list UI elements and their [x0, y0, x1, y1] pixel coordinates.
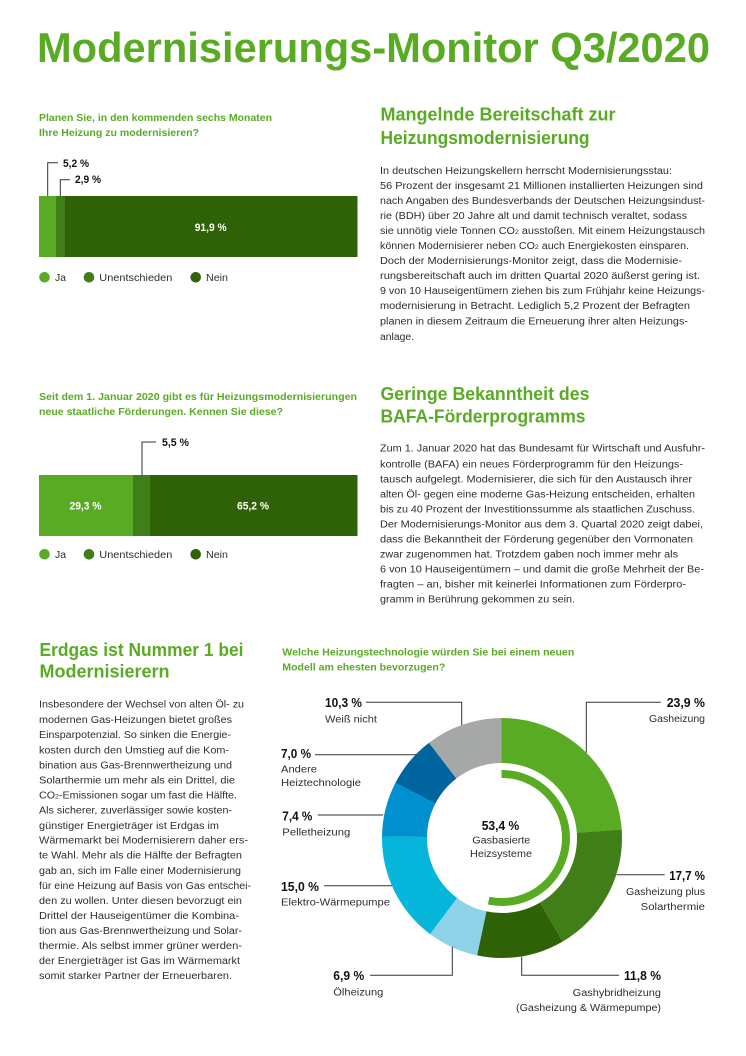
- panel: text BAFA program: [380, 383, 705, 606]
- callout: Elektro-Wärmepumpe: 15,0 %: [281, 880, 319, 894]
- callout: Gashybridheizung: (Gasheizung & Wärmepumpe): [516, 1003, 661, 1014]
- body text 3: den zu wollen. Unter diesen bevorzugt ein: [39, 896, 242, 907]
- body text 2: zwar zugenommen hat. Trotzdem gaben noch immer mehr als: [380, 550, 678, 561]
- body text 3: thermie. Als selbst immer grüner werden-: [39, 941, 242, 952]
- body text 1: In deutschen Heizungskellern herrscht Modernisierungsstau:: [380, 166, 672, 177]
- body text 1: rungsbereitschaft auch im dritten Quartal 2020 äußerst gering ist.: [380, 271, 700, 282]
- callout: Gashybridheizung: [516, 957, 661, 1014]
- callout: 5,2 %: 5,2 %: [63, 158, 89, 170]
- callout: Weiß nicht: 10,3 %: [325, 696, 362, 710]
- title: Modernisierungs-Monitor Q3/2020: [37, 24, 710, 71]
- callout: Gasheizung: Gasheizung: [649, 714, 705, 725]
- callout: Pelletheizung: [282, 809, 383, 839]
- body text 3: Drittel der Hauseigentümer die Kombina-: [39, 911, 239, 922]
- legend 1: [39, 272, 228, 284]
- body text 2: Zum 1. Januar 2020 hat das Bundesamt für Wirtschaft und Ausfuhr-: [380, 444, 705, 455]
- heading: Geringe Bekanntheit: Geringe Bekanntheit des: [380, 383, 590, 404]
- body text 1: Doch der Modernisierungs-Monitor zeigt, dass die Modernisie-: [380, 256, 682, 267]
- question heading 2: [39, 391, 357, 418]
- callout: 5,5 %: 5,5 %: [162, 437, 189, 449]
- body text 3: CO2-Emissionen sogar um fast die Hälfte.: [39, 790, 237, 801]
- callout: Weiß nicht: Weiß nicht: [325, 715, 377, 726]
- body text 3: günstiger Energieträger ist Erdgas im: [39, 821, 219, 832]
- callout: Ölheizung: [333, 947, 452, 999]
- body text 3: modernen Gas-Heizungen bietet großes: [39, 715, 232, 726]
- panel: heating technology donut chart: [281, 647, 705, 1014]
- body text 1: [380, 166, 705, 343]
- legend 2: Ja: [55, 550, 66, 561]
- heading: Mangelnde Bereitschaft: Heizungsmodernisierung: [380, 127, 590, 148]
- stacked bar chart 2: 29,3 %: [70, 500, 102, 512]
- callout: Gasheizung: 23,9 %: [667, 696, 705, 710]
- stacked bar chart 1: [39, 196, 358, 257]
- callout: Gashybridheizung: Gashybridheizung: [573, 988, 661, 999]
- body text 1: sie unnötig viele Tonnen CO 2 ausstoßen. Mit einem Heizungstausch: [380, 226, 705, 237]
- center label: Gasbasierte: [472, 835, 531, 846]
- body text 3: tion aus Gas-Brennwertheizung und Solar-: [39, 926, 242, 937]
- callout: Weiß nicht: [325, 696, 462, 726]
- callout: 2,9 %: 2,9 %: [75, 174, 101, 186]
- body text 3: [39, 699, 251, 982]
- legend 2: Nein: [206, 550, 228, 561]
- callout: Andere Heiztechnologie: Andere: [281, 765, 317, 776]
- body text 1: 9 von 10 Hauseigentümern ziehen bis zum Frühjahr keine Heizungs-: [380, 286, 705, 297]
- body text 1: planen in diesem Zeitraum die Erneuerung ihrer alten Heizungs-: [380, 316, 688, 328]
- legend 1: Ja: [55, 273, 66, 284]
- body text 1: modernisierung in Betracht. Lediglich 5,2 Prozent der Befragten: [380, 301, 690, 312]
- callout: Pelletheizung: Pelletheizung: [282, 828, 350, 839]
- body text 3: für eine Heizung auf Basis von Gas entschei-: [39, 881, 251, 892]
- callout: Ölheizung: 6,9 %: [333, 969, 364, 983]
- callout: Gasheizung plus Solarthermie: Solarthermie: [641, 902, 705, 913]
- callout: Gasheizung plus Solarthermie: [617, 869, 705, 913]
- question heading 1: Ihre Heizung zu modernisieren?: [39, 127, 199, 139]
- body text 3: te Wahl. Mehr als die Hälfte der Befragten: [39, 851, 242, 862]
- heading: Mangelnde Bereitschaft: [380, 104, 616, 148]
- body text 1: 56 Prozent der insgesamt 21 Millionen installierten Heizungen sind: [380, 181, 703, 192]
- question heading 2: neue staatliche Förderungen. Kennen Sie diese?: [39, 406, 283, 418]
- callout: Gashybridheizung: 11,8 %: [624, 969, 661, 983]
- callout: Gasheizung plus Solarthermie: Gasheizung plus: [626, 887, 705, 898]
- heading: Geringe Bekanntheit: BAFA-Förderprogramms: [380, 405, 586, 426]
- body text 2: alten Öl- gegen eine moderne Gas-Heizung entscheiden, erhalten: [380, 488, 695, 500]
- callout: Pelletheizung: 7,4 %: [282, 809, 312, 823]
- stacked bar chart 2: [39, 475, 358, 536]
- heading: Erdgas ist Nummer 1: [40, 639, 244, 682]
- callout: Elektro-Wärmepumpe: [281, 880, 392, 909]
- body text 1: nach Angaben des Bundesverbands der Deutschen Heizungsindust-: [380, 196, 705, 207]
- callout: Ölheizung: Ölheizung: [333, 987, 383, 999]
- body text 2: kontrolle (BAFA) ein neues Förderprogramm für den Heizungs-: [380, 459, 683, 470]
- body text 2: 6 von 10 Hauseigentümern – und damit die große Mehrheit der Be-: [380, 565, 704, 576]
- body text 3: somit starker Partner der Erneuerbaren.: [39, 971, 232, 982]
- body text 2: Der Modernisierungs-Monitor aus dem 3. Quartal 2020 zeigt dabei,: [380, 520, 703, 531]
- body text 3: bination aus Gas-Brennwertheizung und: [39, 760, 232, 771]
- question heading 3: [282, 647, 574, 674]
- callout: Andere Heiztechnologie: [281, 747, 417, 789]
- question heading 1: [39, 112, 272, 139]
- panel: text natural gas: [39, 639, 251, 982]
- question heading 2: Seit dem 1. Januar 2020 gibt es für Heizungsmodernisierungen: [39, 391, 357, 403]
- body text 1: können Modernisierer neben CO 2 auch Energiekosten einsparen.: [380, 241, 689, 252]
- panel: text modernization readiness: [380, 104, 705, 343]
- callout: Andere Heiztechnologie: Heiztechnologie: [281, 778, 361, 789]
- callout: 5,5 %: [142, 437, 189, 475]
- body text 3: Insbesondere der Wechsel von alten Öl- zu: [39, 699, 244, 711]
- body text 1: anlage.: [380, 332, 414, 343]
- body text 3: gab an, sich im Falle einer Modernisierung: [39, 866, 241, 877]
- panel: chart modernization plans: [39, 112, 358, 284]
- center label: [470, 819, 532, 860]
- body text 2: gramm in Berührung gekommen zu sein.: [380, 595, 575, 606]
- body text 3: Einsparpotenzial. So sinken die Energie-: [39, 730, 231, 741]
- legend 1: Nein: [206, 273, 228, 284]
- body text 3: Wärmemarkt bei Modernisierern daher ers-: [39, 836, 248, 847]
- heading: Erdgas ist Nummer 1: Modernisierern: [40, 661, 170, 682]
- question heading 3: Modell am ehesten bevorzugen?: [282, 662, 445, 674]
- legend 2: [39, 549, 228, 561]
- callout: Gasheizung: [586, 696, 705, 753]
- center label: 53,4 %: [482, 819, 519, 833]
- center label: Heizsysteme: [470, 849, 532, 860]
- body text 3: kosten durch den Umstieg auf die Kom-: [39, 745, 229, 756]
- body text 2: dass die Bekanntheit der Förderung gegenüber den Vormonaten: [380, 535, 693, 546]
- stacked bar chart 1: 91,9 %: [195, 222, 227, 234]
- callout: Gasheizung plus Solarthermie: 17,7 %: [669, 869, 705, 883]
- body text 2: [380, 444, 705, 606]
- donut chart: [404, 740, 600, 936]
- callout: Andere Heiztechnologie: 7,0 %: [281, 747, 311, 761]
- heading: Geringe Bekanntheit: [380, 383, 590, 426]
- question heading 3: Welche Heizungstechnologie würden Sie bei einem neuen: [282, 647, 574, 659]
- callout: 5,2 %: [48, 158, 89, 196]
- heading: Erdgas ist Nummer 1: Erdgas ist Nummer 1 bei: [40, 639, 244, 660]
- heading: Mangelnde Bereitschaft: Mangelnde Bereitschaft zur: [380, 104, 616, 125]
- legend 2: Unentschieden: [99, 550, 172, 561]
- body text 3: Solarthermie um mehr als ein Drittel, die: [39, 776, 235, 787]
- panel: chart funding awareness: [39, 391, 358, 561]
- question heading 1: Planen Sie, in den kommenden sechs Monaten: [39, 112, 272, 124]
- body text 3: Als sicherer, zuverlässiger sowie kosten-: [39, 805, 232, 816]
- legend 1: Unentschieden: [99, 273, 172, 284]
- body text 2: bis zu 40 Prozent der Investitionssumme als staatlichen Zuschuss.: [380, 504, 695, 515]
- body text 2: fragten – an, bisher mit keinerlei Informationen zum Förderpro-: [380, 580, 686, 591]
- callout: 2,9 %: [60, 174, 101, 196]
- stacked bar chart 2: 65,2 %: [237, 500, 269, 512]
- body text 2: tausch aufgelegt. Modernisierer, die sich für den Austausch ihrer: [380, 474, 693, 485]
- callout: Elektro-Wärmepumpe: Elektro-Wärmepumpe: [281, 898, 390, 909]
- body text 1: rie (BDH) über 20 Jahre alt und damit technisch veraltet, sodass: [380, 211, 687, 222]
- body text 3: der Energieträger ist Gas im Wärmemarkt: [39, 956, 240, 967]
